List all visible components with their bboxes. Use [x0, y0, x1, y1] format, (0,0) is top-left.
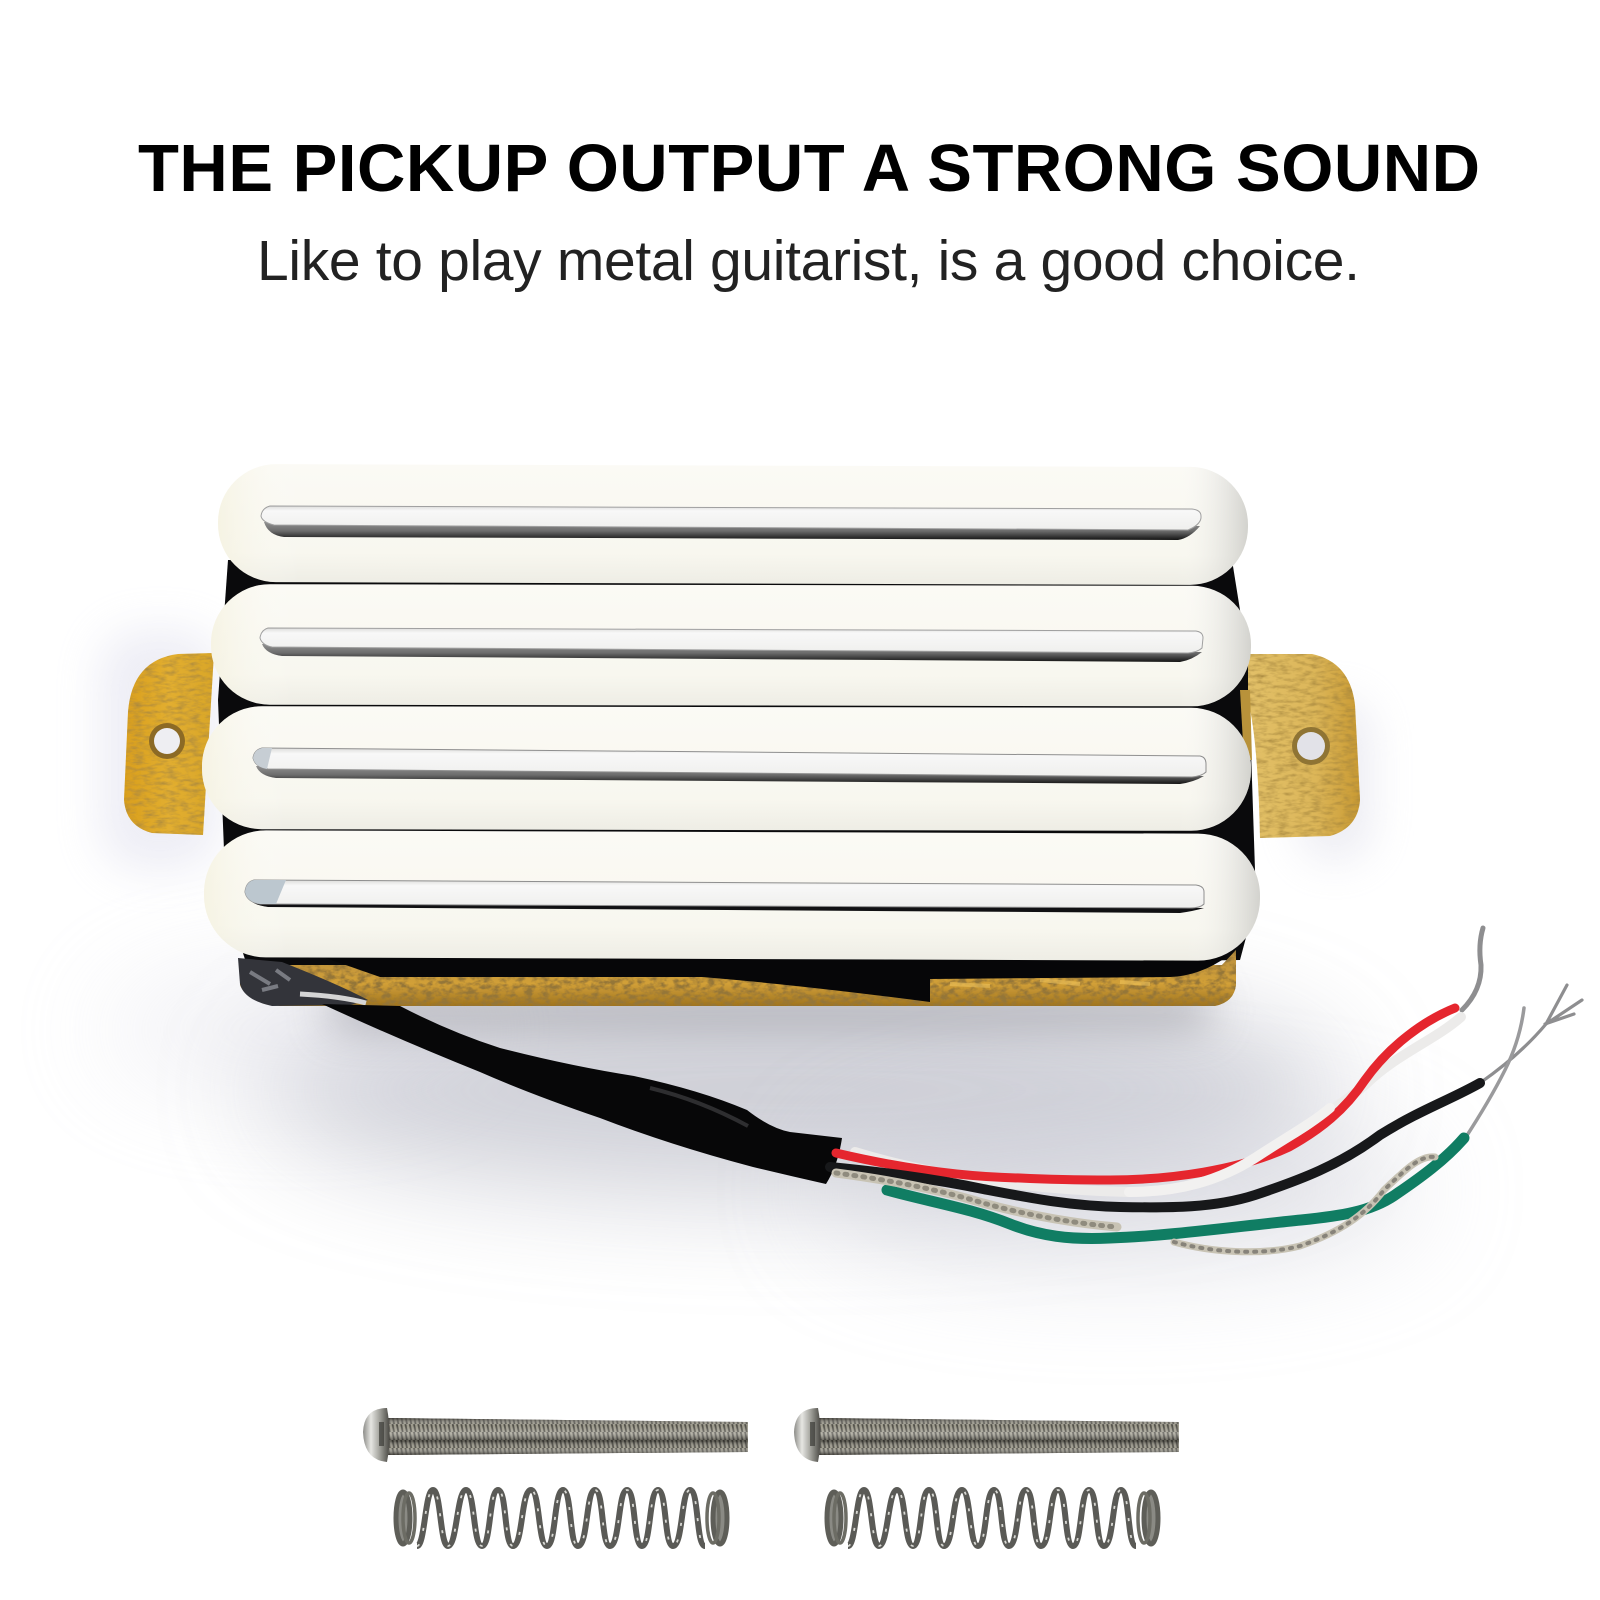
bare strand: red wire — [1462, 928, 1483, 1010]
green wire — [887, 1138, 1464, 1238]
screw — [363, 1408, 748, 1462]
right brass mounting tab — [1240, 654, 1360, 838]
screw and spring set 2 — [794, 1408, 1179, 1546]
black tape and under-cover shadow — [320, 956, 1228, 1002]
bottom brass baseplate — [240, 950, 1236, 1006]
pickup bar 1 — [218, 464, 1248, 585]
title: THE PICKUP OUTPUT A STRONG SOUND — [138, 131, 1480, 206]
pickup bar 4 — [204, 830, 1260, 961]
white wire crossing — [1129, 1108, 1330, 1192]
braided ground wire — [836, 1173, 1117, 1227]
white wire — [855, 1017, 1461, 1192]
soft shadow under the pickup — [100, 630, 1420, 1265]
four-conductor wires — [830, 928, 1582, 1252]
bare strands: green wire — [1464, 1008, 1524, 1140]
black pickup body — [218, 560, 1256, 975]
lead cable with heat shrink — [322, 1004, 842, 1184]
pickup bar 2 — [211, 584, 1251, 706]
braided ground wire tail — [1174, 1157, 1435, 1252]
subtitle: Like to play metal guitarist, is a good choice. — [257, 229, 1360, 293]
solder joint — [238, 958, 368, 1006]
black wire — [830, 1083, 1480, 1207]
screw and spring set 1 — [363, 1408, 748, 1546]
pickup bar 3 — [202, 706, 1251, 831]
humbucker pickup — [124, 464, 1360, 1006]
spring — [396, 1490, 727, 1546]
left brass mounting tab — [124, 653, 214, 835]
bare strands: black wire — [1480, 985, 1582, 1083]
red wire — [836, 1008, 1455, 1180]
